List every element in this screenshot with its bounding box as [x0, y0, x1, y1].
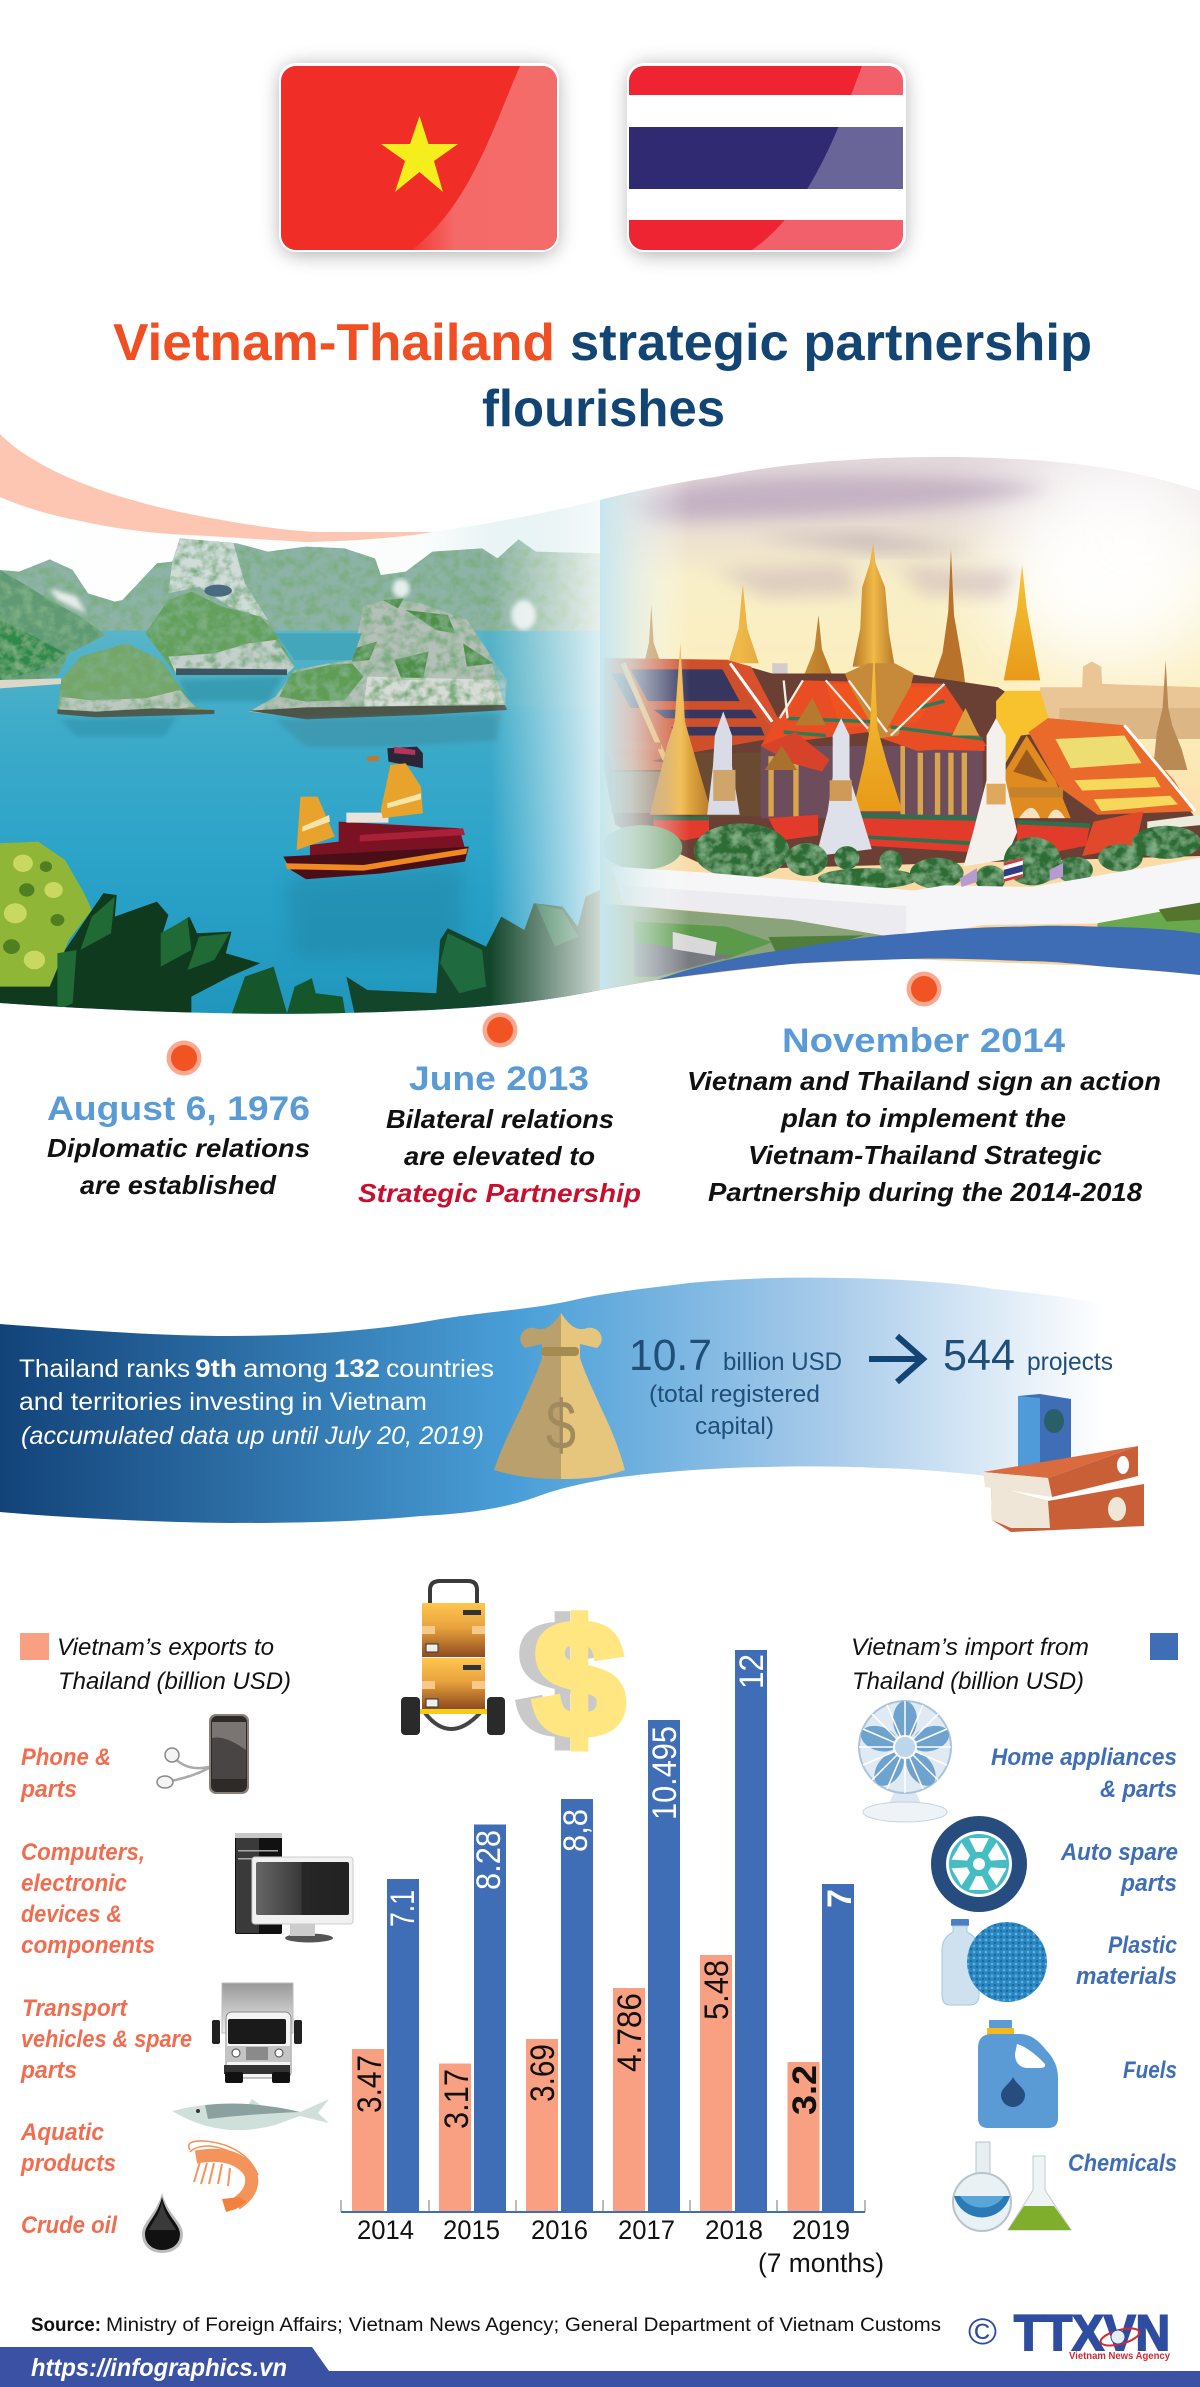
- import product labels: [991, 1744, 1178, 2177]
- import product labels: Fuels: [1123, 2057, 1177, 2084]
- photo banner: Ha Long Bay and Grand Palace: [0, 430, 1200, 1020]
- source line: Ministry of Foreign Affairs; Vietnam News Agency; General Department of Vietnam Customs: [106, 2315, 941, 2336]
- bar chart: 8.28: [470, 1830, 508, 1890]
- island B: [57, 643, 214, 717]
- icon: yellow star: [381, 116, 458, 192]
- Thailand flag: [627, 63, 906, 254]
- icon: junk boat: [283, 747, 469, 879]
- timeline milestone: November 2014: Vietnam and Thailand sign an action: [687, 1066, 1161, 1096]
- timeline milestone: November 2014: [687, 972, 1161, 1207]
- timeline milestone: August 6, 1976: August 6, 1976: [47, 1090, 310, 1128]
- timeline milestone: August 6, 1976: are established: [80, 1170, 277, 1200]
- icon: desktop computer: [235, 1833, 353, 1942]
- bar values: 3.2: [786, 2065, 824, 2115]
- export product labels: [20, 1744, 192, 2239]
- icon: fuel jug: [978, 2020, 1058, 2128]
- timeline milestone: November 2014: Partnership during the 2014-2018: [708, 1177, 1143, 1207]
- investment ranking text: among: [243, 1355, 328, 1383]
- icon: truck: [212, 1983, 302, 2083]
- bar values: 4.786: [611, 1993, 649, 2072]
- import product labels: Chemicals: [1068, 2150, 1177, 2177]
- year labels: (7 months): [758, 2248, 884, 2278]
- export product labels: electronic: [21, 1870, 127, 1897]
- year labels: 2018: [705, 2215, 763, 2245]
- left slope: [0, 570, 105, 683]
- export product labels: devices &: [21, 1901, 122, 1928]
- year labels: 2019: [792, 2215, 850, 2245]
- bar chart: 8,8: [557, 1809, 595, 1852]
- icon: dollar sign: $: [534, 1589, 624, 1770]
- city skyline: [1040, 662, 1200, 720]
- clouds: [623, 476, 1052, 522]
- trees: [694, 823, 1200, 892]
- red palace wall: [654, 815, 1090, 853]
- investment figures: [629, 1331, 1113, 1440]
- icon: electric fan: [858, 1701, 952, 1822]
- icon: plastic bottle and pellets: [942, 1919, 1047, 2005]
- right hall: [1029, 718, 1193, 815]
- title: Vietnam-Thailand: [113, 314, 555, 372]
- island C: [249, 598, 507, 718]
- spires: [853, 543, 895, 667]
- legend: exports: Thailand (billion USD): [58, 1668, 291, 1695]
- year labels: [357, 2215, 884, 2278]
- bar chart: [341, 1650, 884, 2278]
- pink swoosh: [0, 434, 432, 542]
- icon: timeline dot: [906, 972, 942, 1006]
- timeline milestone: June 2013: [358, 1012, 641, 1208]
- icon: timeline dot: [166, 1040, 202, 1076]
- timeline milestone: August 6, 1976: [47, 1040, 310, 1200]
- legend: imports: [851, 1633, 1178, 1695]
- timeline milestone: June 2013: Bilateral relations: [386, 1104, 614, 1134]
- export product labels: products: [20, 2150, 116, 2177]
- bar values: 3.69: [524, 2044, 562, 2102]
- logo: TTXVN: ©: [968, 2311, 997, 2352]
- import product labels: Plastic: [1108, 1932, 1177, 1959]
- export product labels: vehicles & spare: [21, 2026, 192, 2053]
- timeline milestone: November 2014: Vietnam-Thailand Strategic: [748, 1140, 1103, 1170]
- icon: chemical flasks: [953, 2142, 1071, 2231]
- back mountains: [0, 538, 600, 631]
- title: strategic partnership: [570, 314, 1092, 372]
- export product labels: Phone &: [21, 1744, 111, 1771]
- bar values: 3.47: [351, 2055, 389, 2113]
- investment ranking text: 132: [334, 1355, 380, 1383]
- foreground tree: [0, 842, 92, 993]
- icon: binders: [983, 1394, 1144, 1532]
- icon: dollar sign: $: [517, 1589, 607, 1770]
- gold stupas: [650, 643, 711, 815]
- bar values: [351, 1960, 824, 2129]
- Vietnam flag: [279, 63, 559, 254]
- icon: phone and earphones: [157, 1714, 249, 1794]
- year labels: 2016: [531, 2215, 588, 2245]
- central red roofs: [761, 680, 987, 751]
- footer band: [0, 2347, 1200, 2387]
- title: [113, 314, 1092, 438]
- Thai flag on pole: [1004, 858, 1023, 882]
- investment figures: capital): [695, 1413, 774, 1440]
- temple backing: [604, 660, 1200, 870]
- export product labels: components: [21, 1932, 155, 1959]
- investment ranking text: and territories investing in Vietnam: [19, 1388, 427, 1416]
- investment ranking text: (accumulated data up until July 20, 2019): [21, 1422, 484, 1450]
- export product labels: Transport: [22, 1995, 128, 2022]
- timeline milestone: June 2013: are elevated to: [404, 1141, 595, 1171]
- white outer wall: [611, 858, 1200, 939]
- timeline milestone: November 2014: plan to implement the: [780, 1103, 1066, 1133]
- export product labels: parts: [20, 2057, 77, 2084]
- investment band: [0, 1278, 1105, 1523]
- import product labels: parts: [1120, 1870, 1177, 1897]
- logo: TTXVN: Vietnam News Agency: [1069, 2351, 1170, 2362]
- import product labels: materials: [1076, 1963, 1177, 1990]
- legend: exports: Vietnam’s exports to: [57, 1634, 274, 1661]
- axis: [341, 2200, 865, 2212]
- import product labels: Home appliances: [991, 1744, 1177, 1771]
- icon: hand truck with boxes: [401, 1581, 505, 1735]
- icon: timeline dot: [482, 1012, 518, 1048]
- timeline milestone: November 2014: November 2014: [782, 1022, 1065, 1060]
- title: flourishes: [482, 380, 725, 438]
- legend: imports: Vietnam’s import from: [851, 1634, 1089, 1661]
- bars: imports: [387, 1650, 854, 2212]
- photo: Ha Long Bay: [0, 450, 600, 1020]
- left hall roof: [604, 658, 778, 770]
- bar values: 5.48: [698, 1960, 736, 2020]
- blue wave band: [657, 926, 1200, 980]
- icon: tire: [931, 1816, 1027, 1912]
- legend: exports: [20, 1633, 291, 1695]
- investment figures: (total registered: [649, 1381, 820, 1408]
- white stupas: [707, 711, 740, 815]
- bar chart: 10.495: [646, 1726, 684, 1820]
- icon: money bag: $: [546, 1386, 576, 1464]
- reflections: [276, 713, 501, 747]
- investment ranking text: 9th: [195, 1355, 237, 1383]
- investment figures: projects: [1027, 1348, 1113, 1376]
- investment ranking text: [19, 1355, 494, 1450]
- export product labels: Computers,: [21, 1839, 145, 1866]
- export product labels: parts: [20, 1776, 77, 1803]
- year labels: 2014: [357, 2215, 414, 2245]
- import product labels: Auto spare: [1060, 1839, 1178, 1866]
- timeline milestone: August 6, 1976: Diplomatic relations: [47, 1133, 310, 1163]
- investment figures: 544: [943, 1331, 1015, 1380]
- investment ranking text: countries: [386, 1355, 494, 1383]
- icon: fish: [172, 2099, 329, 2130]
- bars: exports: [352, 1955, 820, 2212]
- timeline milestone: June 2013: June 2013: [409, 1060, 589, 1098]
- footer band: https://infographics.vn: [31, 2354, 287, 2382]
- bar chart: 7: [821, 1889, 859, 1908]
- year labels: 2015: [443, 2215, 500, 2245]
- legend: imports: Thailand (billion USD): [852, 1668, 1084, 1695]
- investment figures: billion USD: [723, 1348, 842, 1376]
- source line: Source:: [31, 2315, 101, 2336]
- street below wall: [600, 904, 906, 990]
- investment figures: 10.7: [629, 1331, 712, 1380]
- big gold stupa: [1004, 565, 1040, 680]
- bar chart: 12: [733, 1654, 771, 1689]
- foreground leaves: [0, 893, 260, 1020]
- photo: Grand Palace Bangkok: [600, 430, 1200, 990]
- import product labels: & parts: [1100, 1776, 1177, 1803]
- logo: TTXVN: TTXVN: [1014, 2305, 1170, 2361]
- island A: [145, 592, 295, 674]
- icon: money bag: [494, 1313, 625, 1479]
- icon: shrimp: [189, 2141, 258, 2212]
- bar values: 3.17: [438, 2069, 476, 2129]
- icon: oil drop: [142, 2193, 183, 2253]
- arrow: [869, 1336, 923, 1382]
- investment ranking text: Thailand ranks: [19, 1355, 190, 1383]
- export product labels: Aquatic: [20, 2119, 104, 2146]
- year labels: 2017: [618, 2215, 675, 2245]
- hall columns: [692, 753, 765, 816]
- export product labels: Crude oil: [21, 2212, 118, 2239]
- bar chart: 7.1: [384, 1890, 422, 1927]
- timeline milestone: June 2013: Strategic Partnership: [358, 1178, 641, 1208]
